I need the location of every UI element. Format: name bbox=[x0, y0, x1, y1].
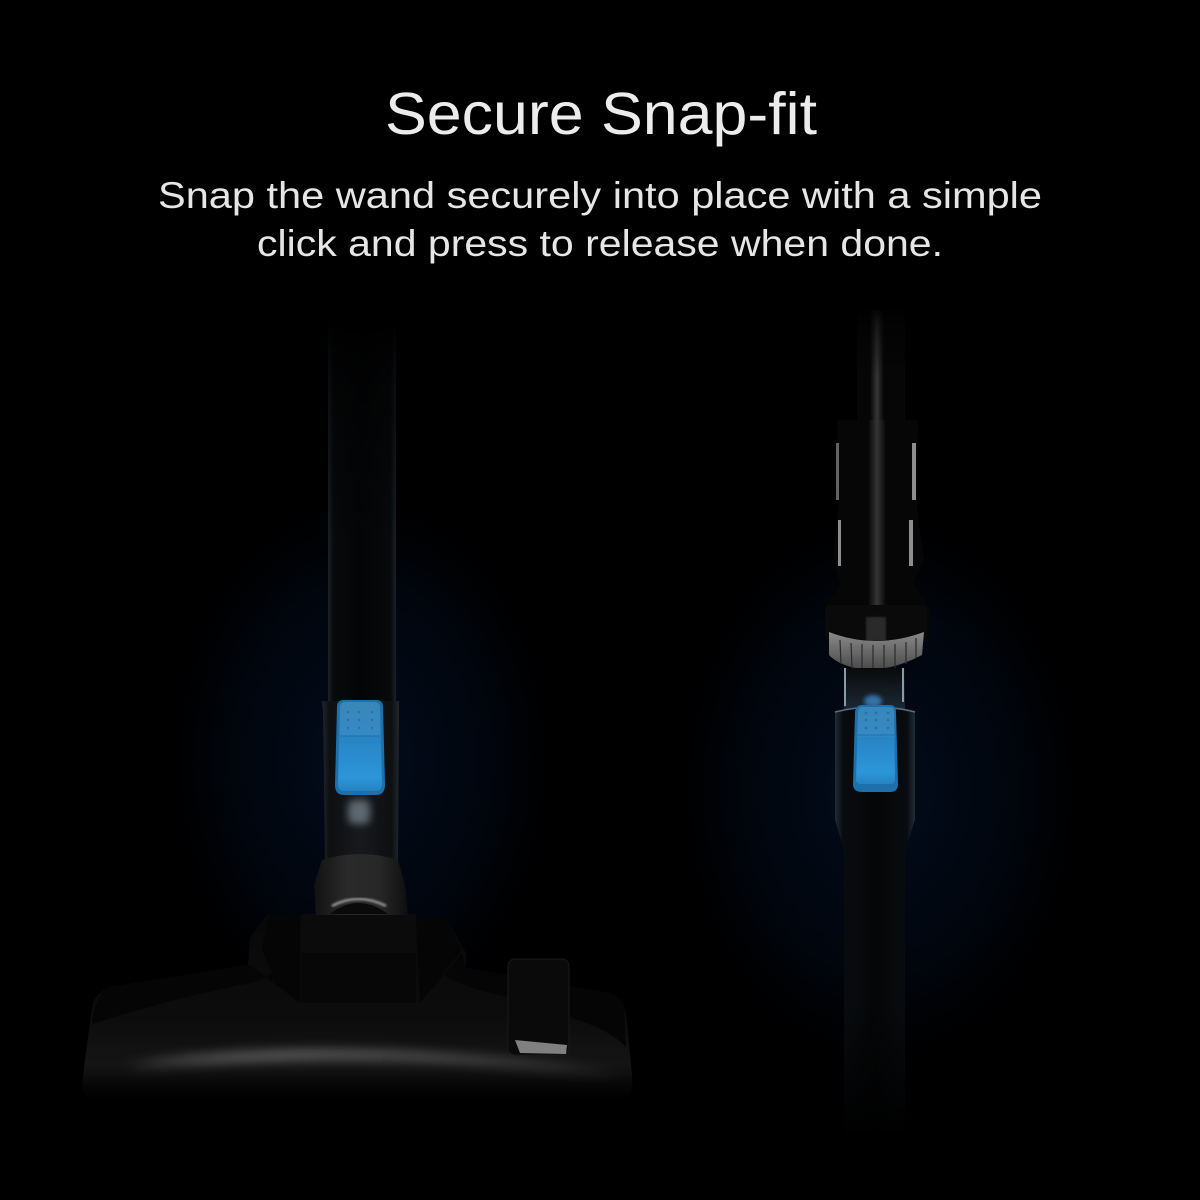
floor head upper shell bbox=[92, 913, 626, 1047]
right neck bbox=[844, 668, 905, 712]
right wand socket and lower tube bbox=[835, 707, 915, 1140]
left wand tube bbox=[322, 320, 403, 704]
background glow: left bbox=[152, 470, 572, 1050]
head highlight bbox=[125, 1051, 625, 1075]
right body edge highlights bbox=[836, 443, 916, 566]
right upper tube bbox=[850, 305, 912, 425]
right collar bbox=[825, 605, 927, 641]
description: Snap the wand securely into place with a simple bbox=[158, 175, 1042, 216]
head bottom fade bbox=[70, 1075, 650, 1105]
floor head body bbox=[82, 915, 632, 1100]
head neck upper band bbox=[301, 914, 416, 953]
right vacuum: wand with brush bbox=[825, 305, 929, 1140]
head neck bbox=[301, 914, 416, 1003]
right brush body bbox=[825, 420, 929, 640]
brush bristles bbox=[829, 632, 924, 670]
background glow: right bbox=[660, 490, 1100, 1090]
left vacuum: wand with floor head bbox=[70, 320, 650, 1105]
description: click and press to release when done. bbox=[257, 223, 943, 264]
left pivot collar bbox=[314, 854, 408, 915]
left wand socket bbox=[322, 701, 399, 860]
right release button bbox=[853, 705, 898, 792]
foot pedal clip bbox=[508, 959, 569, 1055]
title: Secure Snap-fit bbox=[385, 81, 817, 147]
left socket glow bbox=[348, 800, 370, 824]
left release button bbox=[335, 700, 385, 795]
description bbox=[158, 175, 1042, 264]
right center highlight bbox=[868, 420, 886, 605]
